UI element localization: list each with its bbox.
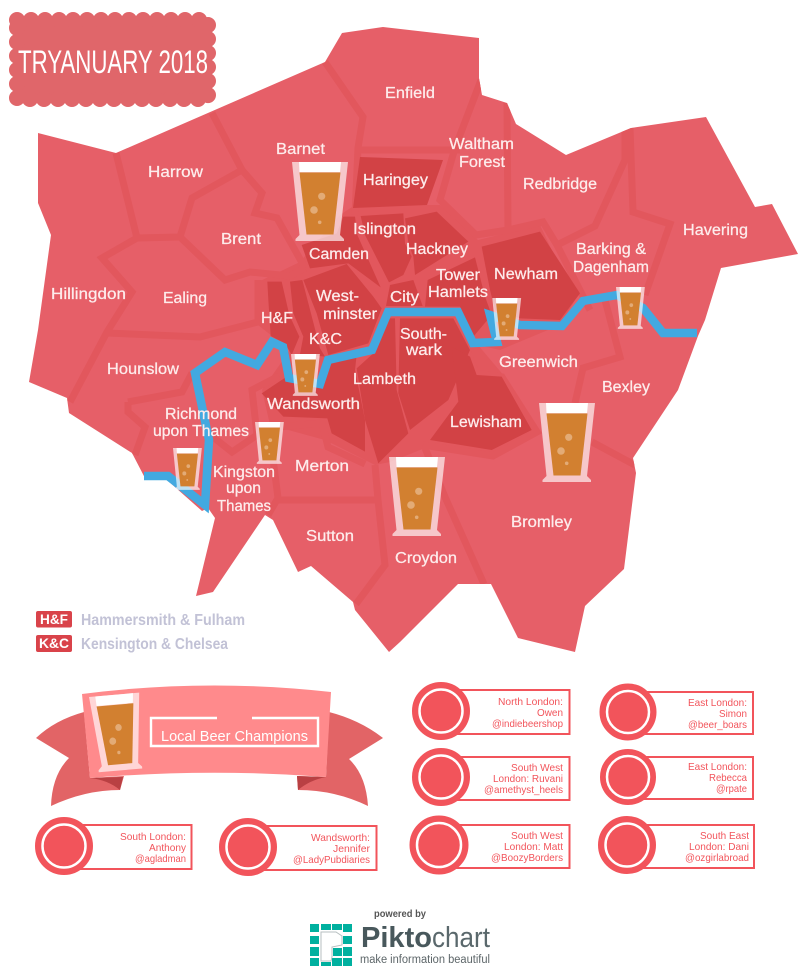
card: South West London Matt: London: Matt [504, 841, 563, 853]
card: Wandsworth Jennifer: Wandsworth: [311, 832, 370, 844]
beer glass: Newham [492, 298, 521, 340]
card: South London Anthony: South London: [120, 831, 186, 843]
Wandsworth shape [262, 355, 365, 452]
label: Richmond upon Thames: upon Thames [153, 423, 249, 440]
label: Croydon: Croydon [395, 550, 457, 567]
label: Tower Hamlets: Hamlets [428, 284, 488, 301]
label: Kingston upon Thames: Thames [217, 498, 271, 515]
dark inner boroughs [262, 157, 580, 463]
Piktochart wordmark: chart [432, 922, 490, 954]
label: Southwark: South- [400, 326, 447, 343]
ribbon banner [36, 685, 383, 806]
Kensington and Chelsea shape [290, 280, 325, 357]
Piktochart tagline: make information beautiful [360, 954, 490, 966]
card: South East London Dani [602, 820, 754, 870]
card: East London Rebecca: @rpate [716, 783, 747, 795]
card: North London Owen [416, 686, 570, 736]
champion cards [39, 686, 754, 872]
label: Barking and Dagenham [573, 241, 649, 276]
label: Barking and Dagenham: Dagenham [573, 259, 649, 276]
label: Havering: Havering [683, 222, 748, 239]
legend: Hammersmith and Fulham [36, 611, 245, 629]
title text: TRYANUARY 2018 [18, 44, 208, 80]
label: Tower Hamlets [428, 267, 488, 301]
ribbon heading box [151, 718, 318, 746]
ribbon folds [90, 776, 326, 790]
label: Lewisham: Lewisham [450, 414, 522, 431]
central boroughs group [262, 212, 492, 463]
card: South London Anthony: @agladman [135, 853, 186, 865]
card: East London Simon: Simon [719, 708, 747, 720]
borough labels [51, 85, 748, 567]
beer glass: Bromley [539, 403, 595, 482]
label: Waltham Forest: Forest [459, 154, 506, 171]
label: City: City [390, 289, 419, 306]
beer glass: Kingston [255, 422, 284, 464]
card: Wandsworth Jennifer [223, 822, 376, 872]
label: Wandsworth: Wandsworth [267, 396, 360, 413]
legend: Hammersmith and Fulham: Hammersmith & Fulham [81, 612, 245, 629]
label: Westminster [316, 288, 377, 323]
label: Lambeth: Lambeth [353, 371, 416, 388]
ribbon front [82, 685, 331, 778]
card: Wandsworth Jennifer: Jennifer [333, 843, 370, 855]
powered by text: powered by [374, 909, 426, 920]
card: South East London Dani: London: Dani [689, 841, 749, 853]
label: Camden: Camden [309, 246, 369, 263]
card: North London Owen: Owen [537, 707, 563, 719]
beer glass: Barnet [292, 162, 348, 241]
label: Merton: Merton [295, 458, 349, 475]
Piktochart branding [310, 909, 490, 966]
label: Haringey: Haringey [363, 172, 428, 189]
label: Richmond upon Thames: Richmond [165, 406, 237, 423]
card: Wandsworth Jennifer: @LadyPubdiaries [293, 854, 370, 866]
card: North London Owen: North London: [498, 696, 563, 708]
card: East London Simon: @beer_boars [688, 719, 747, 731]
Tower Hamlets shape [425, 257, 492, 337]
card: South London Anthony [39, 821, 192, 871]
Piktochart wordmark: Pikto [361, 922, 432, 954]
card: South London Anthony: Anthony [149, 842, 187, 854]
label: Harrow: Harrow [148, 164, 204, 181]
card: East London Rebecca: Rebecca [709, 772, 747, 784]
label: H&F: H&F [261, 310, 293, 327]
card: North London Owen: @indiebeershop [492, 718, 563, 730]
legend: Hammersmith and Fulham: H&F [40, 611, 68, 627]
card: South East London Dani: South East [700, 830, 749, 842]
City shape [386, 280, 423, 306]
beer glass: Barking [616, 287, 645, 329]
card: South West London Ruvani: London: Ruvani [493, 773, 563, 785]
card: East London Simon [604, 688, 753, 736]
beer glass: Wandsworth [291, 354, 320, 396]
card: South West London Matt: South West [511, 830, 563, 842]
label: Sutton: Sutton [306, 528, 354, 545]
map silhouette [29, 27, 798, 652]
Piktochart logo icon [310, 924, 352, 966]
card: South West London Ruvani: @amethyst_heels [484, 784, 563, 796]
beer glass: Richmond [173, 448, 202, 490]
label: Brent: Brent [221, 231, 262, 248]
borough boundaries [70, 62, 670, 604]
card: South West London Ruvani: South West [511, 762, 563, 774]
River Thames [144, 295, 697, 505]
label: Kingston upon Thames: upon [226, 480, 261, 497]
label: Greenwich: Greenwich [499, 354, 578, 371]
label: Waltham Forest: Waltham [449, 136, 514, 153]
label: Southwark [400, 326, 447, 359]
Hackney shape [405, 212, 468, 275]
label: Kingston upon Thames: Kingston [213, 464, 275, 481]
Westminster shape [303, 264, 382, 355]
map of London boroughs [29, 27, 798, 652]
label: Ealing: Ealing [163, 290, 207, 307]
label: Bexley: Bexley [602, 379, 650, 396]
label: Tower Hamlets: Tower [436, 267, 480, 284]
label: Hillingdon: Hillingdon [51, 286, 126, 303]
label: Richmond upon Thames [153, 406, 249, 440]
label: Bromley: Bromley [511, 514, 572, 531]
label: Westminster: West- [316, 288, 359, 305]
Camden shape [302, 217, 381, 287]
label: Barnet: Barnet [276, 141, 326, 158]
beer glass: Croydon [389, 457, 445, 536]
Haringey [353, 157, 443, 208]
legend: Kensington and Chelsea: Kensington & Chelsea [81, 636, 228, 653]
label: K&C: K&C [309, 331, 342, 348]
label: Enfield: Enfield [385, 85, 435, 102]
card: East London Simon: East London: [688, 697, 747, 709]
ribbon heading: Local Beer Champions [161, 728, 308, 745]
Lambeth shape [357, 318, 408, 463]
Southwark shape [398, 318, 470, 430]
legend: Kensington and Chelsea: K&C [39, 635, 69, 651]
card: South East London Dani: @ozgirlabroad [685, 852, 749, 864]
label: Redbridge: Redbridge [523, 176, 597, 193]
label: Waltham Forest [449, 136, 514, 171]
Newham shape [482, 232, 580, 320]
ribbon beer glass [89, 693, 146, 773]
label: Newham: Newham [494, 266, 558, 283]
label: Southwark: wark [405, 342, 442, 359]
card: East London Rebecca [604, 753, 753, 801]
label: Kingston upon Thames [213, 464, 275, 515]
card: South West London Matt [414, 820, 570, 870]
label: Hackney: Hackney [406, 241, 468, 258]
label: Westminster: minster [323, 306, 377, 323]
Islington shape [361, 213, 412, 282]
label: Hounslow: Hounslow [107, 361, 180, 378]
legend [36, 611, 245, 653]
label: Islington: Islington [353, 221, 416, 238]
Lewisham shape [430, 347, 532, 450]
Hammersmith and Fulham shape [267, 282, 299, 355]
card: East London Rebecca: East London: [688, 761, 747, 773]
ribbon left tail [36, 712, 124, 806]
card: South West London Matt: @BoozyBorders [491, 852, 563, 864]
ribbon right tail [297, 712, 383, 806]
title badge [17, 20, 208, 99]
inner London backing [258, 205, 575, 465]
Piktochart wordmark [361, 922, 490, 954]
card: South West London Ruvani [416, 752, 570, 802]
legend: Kensington and Chelsea [36, 635, 228, 653]
label: Barking and Dagenham: Barking & [576, 241, 647, 258]
